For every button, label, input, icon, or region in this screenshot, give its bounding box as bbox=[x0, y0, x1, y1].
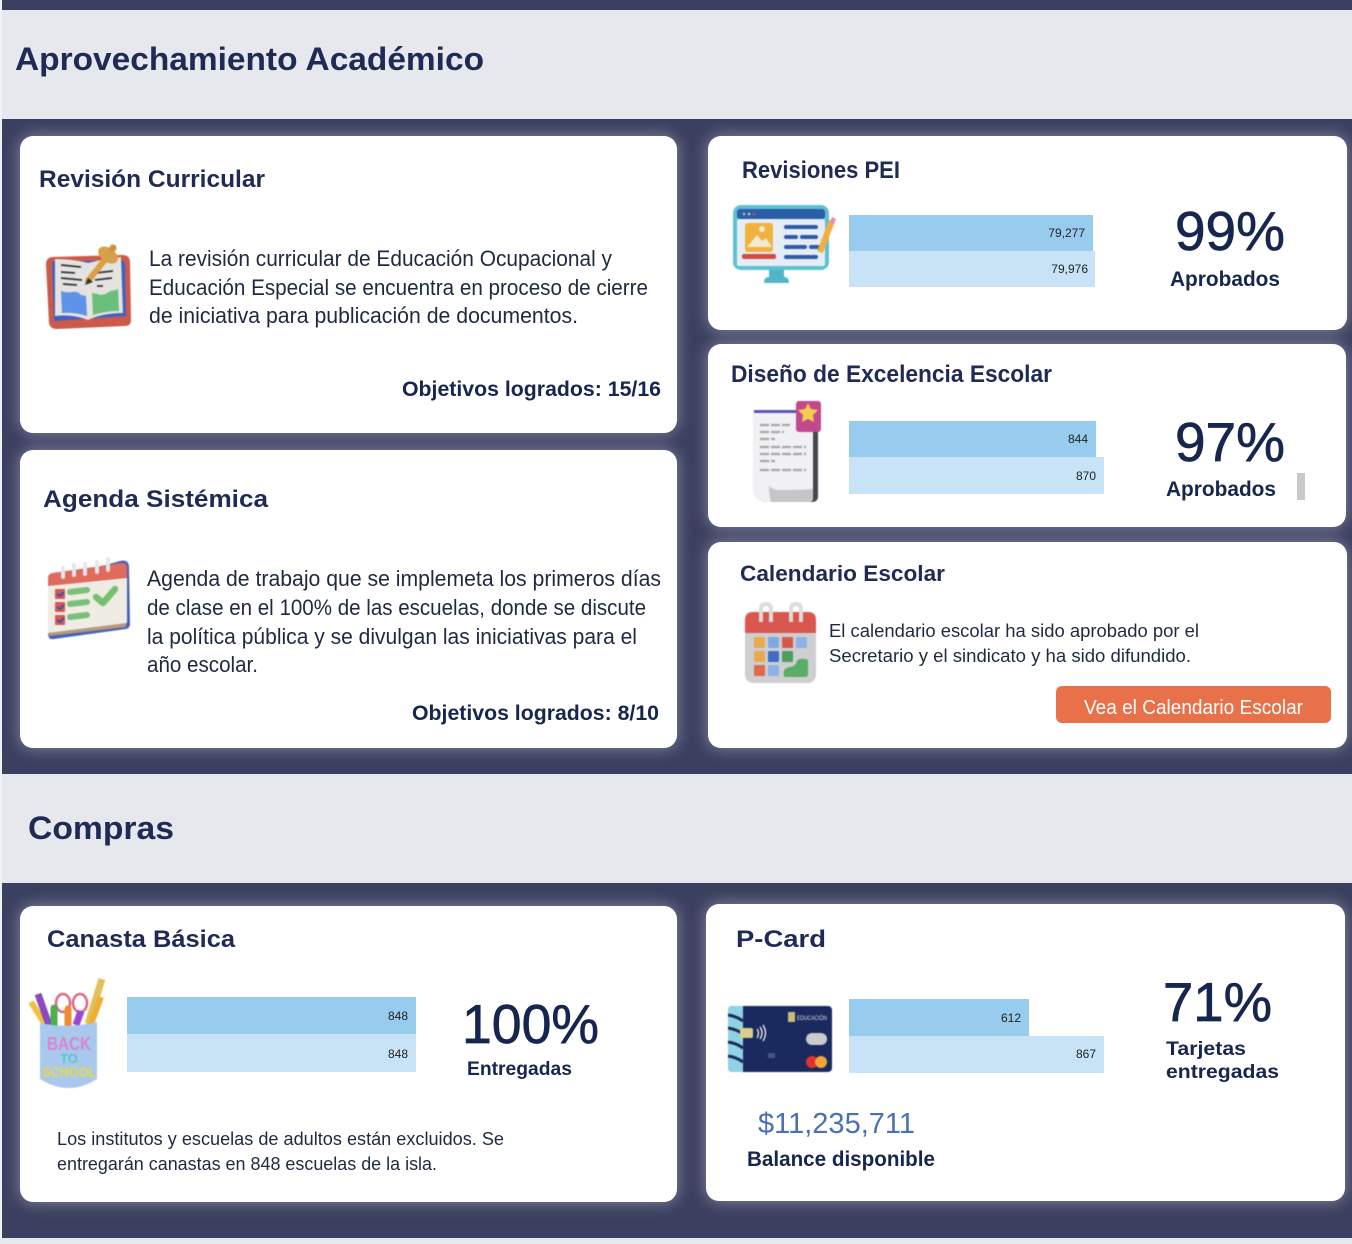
metric: 100% Entregadas: 100% bbox=[462, 993, 599, 1055]
bar chart: P-Card: 867 bbox=[1076, 1047, 1096, 1061]
bar chart: P-Card: 612 bbox=[1001, 1011, 1021, 1025]
bottom band bbox=[0, 1238, 1352, 1244]
metric: 99% Aprobados: Aprobados bbox=[1170, 268, 1280, 291]
bar chart: Canasta Básica: 848 bbox=[388, 1047, 408, 1061]
metric: 71% Tarjetas entregadas: 71% bbox=[1163, 971, 1272, 1033]
bar chart: Revisiones PEI: 79,976 bbox=[1051, 262, 1088, 276]
bar chart: Diseño de Excelencia Escolar: 870 bbox=[1076, 469, 1096, 483]
heading: Revisión Curricular: Revisión Curricular bbox=[39, 166, 265, 193]
text block: Revisión Curricular description: La revisión curricular de Educación Ocupacional y bbox=[149, 246, 612, 271]
metric: 71% Tarjetas entregadas: Tarjetas bbox=[1166, 1039, 1246, 1060]
panel: Revisión Curricular bbox=[20, 136, 677, 433]
heading: Calendario Escolar: Calendario Escolar bbox=[740, 561, 945, 586]
bar chart: Diseño de Excelencia Escolar: 844 bbox=[1068, 432, 1088, 446]
section heading: Compras: Compras bbox=[28, 810, 174, 846]
objectives: 8/10: Objetivos logrados: 8/10 bbox=[412, 702, 659, 725]
text block: Calendario description bbox=[829, 621, 1199, 666]
metric: 100% Entregadas bbox=[462, 993, 599, 1080]
panel: Revisiones PEI bbox=[708, 136, 1347, 330]
icon: checklist calendar bbox=[48, 559, 130, 639]
text block: Calendario description: Secretario y el sindicato y ha sido difundido. bbox=[829, 646, 1191, 666]
heading: Canasta Básica: Canasta Básica bbox=[47, 926, 236, 953]
bar chart: Diseño de Excelencia Escolar bbox=[849, 421, 1104, 494]
icon: back to school pencil cup: TO bbox=[60, 1051, 78, 1066]
metric: balance disponible: Balance disponible bbox=[747, 1148, 935, 1171]
heading: P-Card: P-Card bbox=[736, 926, 826, 953]
text block: Agenda Sistémica description: año escolar. bbox=[147, 652, 258, 677]
panel: Calendario Escolar bbox=[708, 542, 1347, 748]
text block: Agenda Sistémica description bbox=[147, 566, 661, 677]
bar chart: Revisiones PEI bbox=[849, 215, 1095, 287]
button: Vea el Calendario Escolar: Vea el Calendario Escolar bbox=[1084, 697, 1303, 719]
panel: P-Card bbox=[706, 904, 1345, 1201]
bar chart: Canasta Básica bbox=[127, 997, 416, 1072]
text block: Canasta description: entregarán canastas en 848 escuelas de la isla. bbox=[57, 1154, 437, 1174]
bar chart: Revisiones PEI: 79,277 bbox=[1048, 226, 1085, 240]
text block: Agenda Sistémica description: de clase en el 100% de las escuelas, donde se discute bbox=[147, 595, 646, 620]
objectives: 15/16: Objetivos logrados: 15/16 bbox=[402, 378, 661, 401]
icon: calendar bbox=[745, 604, 816, 683]
scroll indicator bbox=[1297, 473, 1305, 500]
bar chart: Canasta Básica: 848 bbox=[388, 1009, 408, 1023]
icon: credit card: EDUCACIÓN bbox=[797, 1015, 827, 1022]
text block: Canasta description bbox=[57, 1129, 504, 1174]
metric: 97% Aprobados: Aprobados bbox=[1166, 478, 1276, 501]
metric: 97% Aprobados bbox=[1166, 411, 1285, 501]
metric: 99% Aprobados bbox=[1170, 200, 1285, 291]
text block: Agenda Sistémica description: la política pública y se divulgan las iniciativas para el bbox=[147, 624, 637, 649]
section band: Aprovechamiento Académico bbox=[2, 10, 1352, 119]
text block: Calendario description: El calendario escolar ha sido aprobado por el bbox=[829, 621, 1199, 641]
metric: 71% Tarjetas entregadas: entregadas bbox=[1166, 1062, 1279, 1083]
heading: Agenda Sistémica: Agenda Sistémica bbox=[43, 486, 269, 513]
panel: Canasta Básica bbox=[20, 906, 677, 1202]
text block: Revisión Curricular description: Educación Especial se encuentra en proceso de cierre bbox=[149, 275, 648, 300]
text block: Canasta description: Los institutos y escuelas de adultos están excluidos. Se bbox=[57, 1129, 504, 1149]
metric: 100% Entregadas: Entregadas bbox=[467, 1059, 572, 1080]
metric: balance disponible bbox=[747, 1108, 935, 1171]
metric: 97% Aprobados: 97% bbox=[1175, 411, 1285, 473]
heading: Diseño de Excelencia Escolar: Diseño de Excelencia Escolar bbox=[731, 361, 1052, 388]
icon: open book with pen bbox=[46, 243, 131, 329]
heading: Revisiones PEI: Revisiones PEI bbox=[742, 157, 900, 184]
metric: balance disponible: $11,235,711 bbox=[758, 1108, 915, 1140]
icon: monitor with pencil bbox=[733, 205, 836, 283]
icon: credit card bbox=[728, 1006, 832, 1072]
metric: 99% Aprobados: 99% bbox=[1175, 200, 1285, 262]
panel: Agenda Sistémica bbox=[20, 450, 677, 748]
text block: Revisión Curricular description bbox=[149, 246, 648, 328]
section band: Compras bbox=[2, 774, 1352, 883]
metric: 71% Tarjetas entregadas bbox=[1163, 971, 1279, 1083]
text block: Revisión Curricular description: de iniciativa para publicación de documentos. bbox=[149, 303, 578, 328]
icon: document with star bbox=[753, 401, 821, 502]
button: Vea el Calendario Escolar bbox=[1056, 686, 1331, 723]
icon: back to school pencil cup: BACK bbox=[47, 1034, 91, 1054]
icon: back to school pencil cup bbox=[31, 979, 102, 1088]
bar chart: P-Card bbox=[849, 999, 1104, 1073]
text block: Agenda Sistémica description: Agenda de trabajo que se implemeta los primeros días bbox=[147, 566, 661, 591]
section heading: Aprovechamiento Académico: Aprovechamiento Académico bbox=[15, 41, 484, 77]
panel: Diseño de Excelencia Escolar bbox=[708, 344, 1346, 527]
icon: back to school pencil cup: SCHOOL bbox=[42, 1064, 96, 1081]
